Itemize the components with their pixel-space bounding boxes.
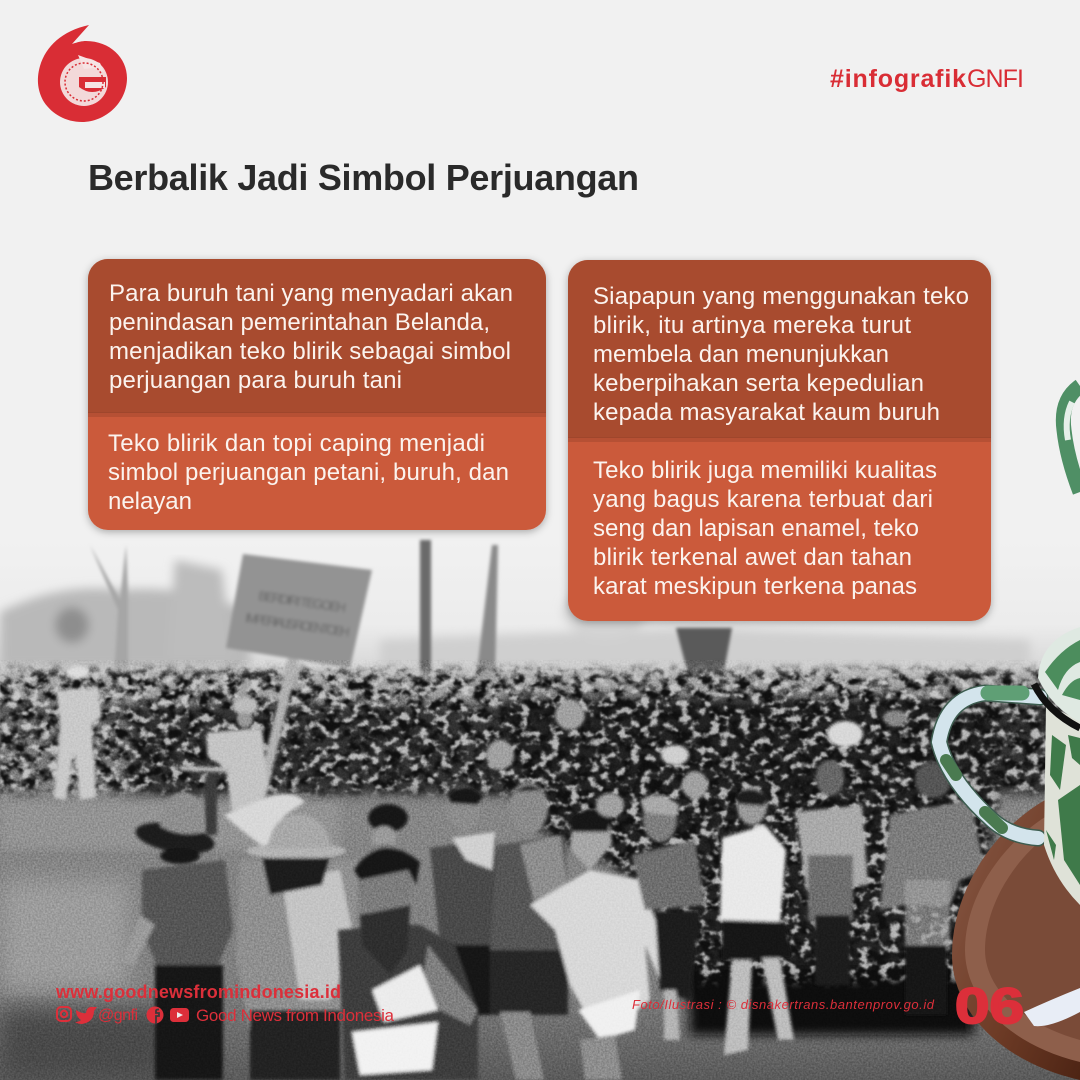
- sign: banner on a pole: BERDIRI TEGOEH: [258, 588, 347, 615]
- right card lower text: karat meskipun terkena panas: [593, 573, 917, 600]
- background figures: [54, 666, 268, 835]
- marcher: boy in gray shirt: [632, 795, 705, 1040]
- runner in foreground: [338, 844, 478, 1080]
- right card upper text: blirik, itu artinya mereka turut: [593, 312, 911, 339]
- left card upper text: Para buruh tani yang menyadari akan: [109, 280, 513, 307]
- right card lower text: yang bagus karena terbuat dari: [593, 486, 933, 513]
- other crowd faces: [486, 700, 907, 817]
- title: Berbalik Jadi Simbol Perjuangan: [88, 157, 639, 198]
- photo credit: Foto/Ilustrasi : © disnakertrans.bantenprov.go.id: [632, 997, 935, 1012]
- right card lower text: blirik terkenal awet dan tahan: [593, 544, 912, 571]
- social handle: @gnfi: [98, 1007, 138, 1024]
- right card upper text: kepada masyarakat kaum buruh: [593, 399, 940, 426]
- left card upper text: perjuangan para buruh tani: [109, 367, 402, 394]
- panel: left card: [88, 259, 546, 530]
- hashtag: GNFI: [967, 65, 1024, 93]
- enamel teapot handle: [939, 693, 1040, 838]
- teapot handle at top right: [1063, 386, 1080, 492]
- logo emblem: [60, 55, 108, 106]
- right card upper text: membela dan menunjukkan: [593, 341, 889, 368]
- boy with black cap: [368, 804, 408, 850]
- ground: [0, 700, 1080, 1080]
- foreground marchers: [122, 700, 985, 1080]
- photo grain: [0, 660, 1080, 1080]
- sign: banner on a pole: IMPERIALIS ROENTOEH: [245, 610, 351, 640]
- page number: 06: [955, 978, 1024, 1034]
- panel: right card: [568, 260, 991, 621]
- marcher: man in light shirt: [796, 760, 868, 985]
- right card upper text: [593, 283, 969, 426]
- left card lower text: [108, 430, 509, 515]
- marcher: man at right in gray shirt: [880, 762, 985, 1015]
- sign: banner on a pole: [226, 554, 372, 815]
- hashtag: #infografik: [830, 65, 966, 93]
- crowd band: [0, 672, 1080, 1035]
- left card lower text: Teko blirik dan topi caping menjadi: [108, 430, 485, 457]
- left card upper text: penindasan pemerintahan Belanda,: [109, 309, 490, 336]
- icon: youtube: [170, 1008, 189, 1022]
- right card lower text: [593, 457, 937, 600]
- social name: Good News from Indonesia: [196, 1006, 395, 1025]
- tree trunks: [90, 540, 732, 710]
- logo: [38, 25, 127, 122]
- marcher: white hat: [224, 794, 360, 1080]
- right card lower text: Teko blirik juga memiliki kualitas: [593, 457, 937, 484]
- icon: twitter: [75, 1007, 97, 1024]
- marcher: straw hat, dark shirt: [122, 792, 233, 1080]
- right card upper text: keberpihakan serta kepedulian: [593, 370, 924, 397]
- left card upper text: menjadikan teko blirik sebagai simbol: [109, 338, 511, 365]
- right card lower text: seng dan lapisan enamel, teko: [593, 515, 919, 542]
- marcher: man covering his mouth: [490, 782, 572, 1080]
- marcher: dark-shirt boy: [430, 786, 498, 1015]
- left card lower text: simbol perjuangan petani, buruh, dan: [108, 459, 509, 486]
- marcher: boy in white shirt: [720, 787, 794, 1055]
- footer website: www.goodnewsfromindonesia.id: [55, 982, 341, 1002]
- distant trees: [0, 560, 1030, 670]
- background photo: crowd of workers marching: [0, 540, 1080, 1080]
- left card upper text: [109, 280, 513, 394]
- crowd texture: [0, 650, 1080, 990]
- marcher: boy with cap in white shirt: [530, 809, 680, 1080]
- left card lower text: nelayan: [108, 488, 192, 515]
- plate under the teapot: [952, 785, 1080, 1080]
- right card upper text: Siapapun yang menggunakan teko: [593, 283, 969, 310]
- enamel teapot body: [1034, 627, 1080, 905]
- icon: instagram: [57, 1007, 71, 1021]
- icon: facebook: [146, 1006, 164, 1024]
